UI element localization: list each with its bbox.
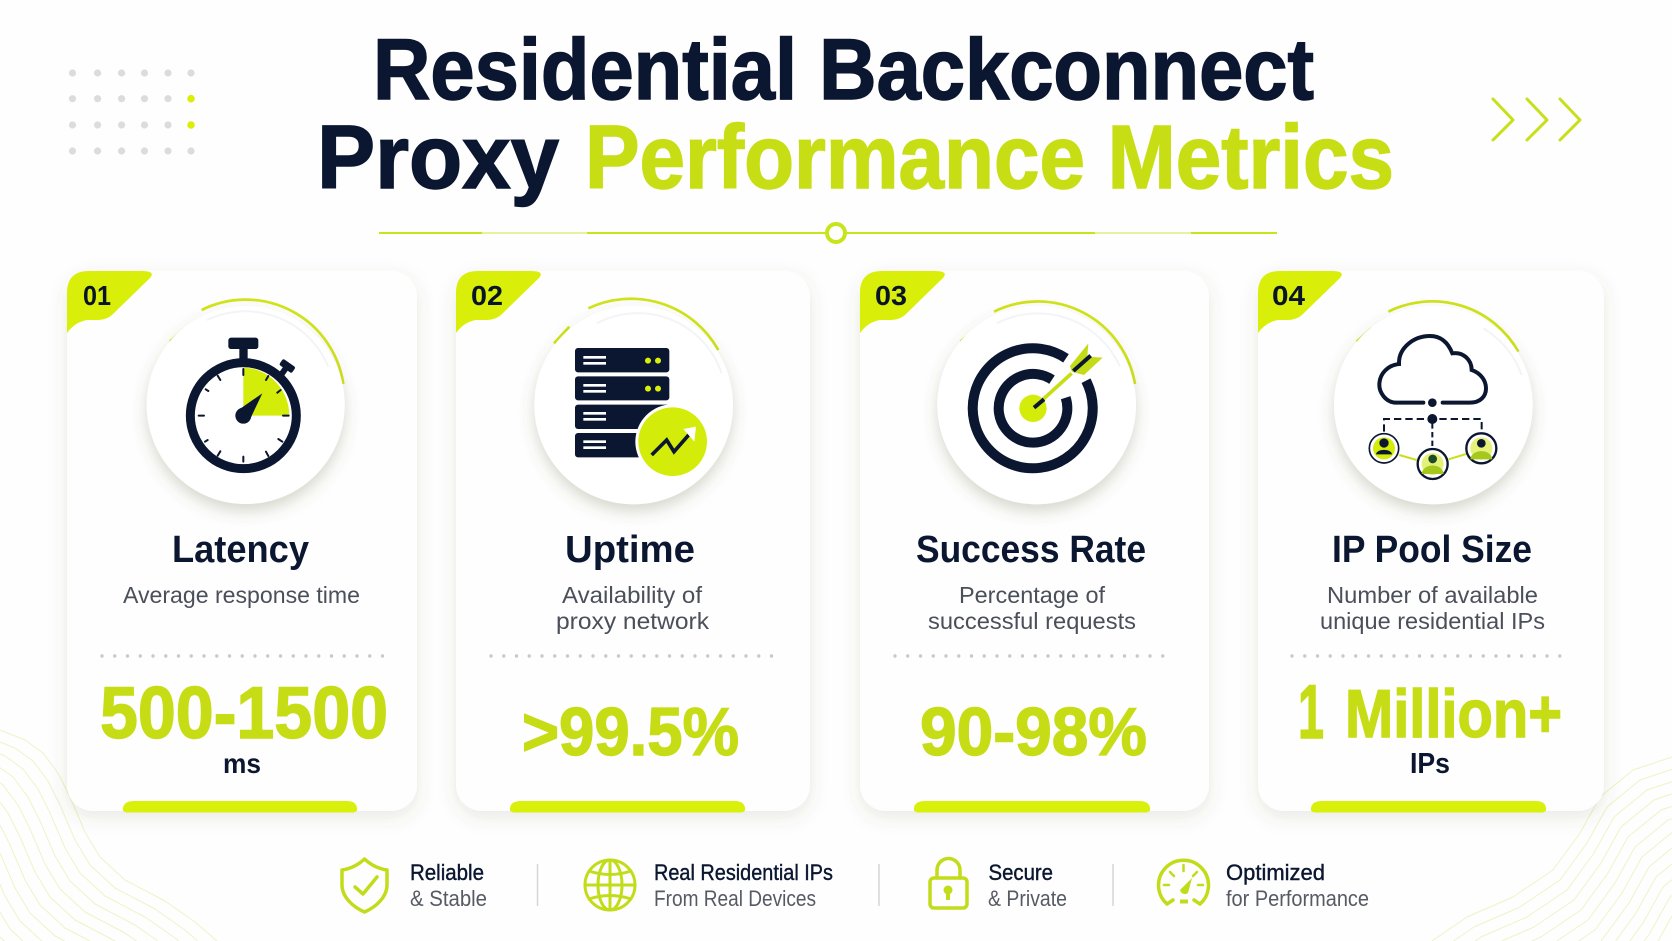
decorative wave lines: bottom left [0, 730, 217, 941]
icon: shield [342, 859, 387, 912]
label text [1226, 860, 1369, 911]
title: Performance Metrics [585, 108, 1394, 208]
card background [860, 271, 1209, 811]
description [556, 582, 710, 634]
value: 500-1500 [100, 673, 388, 754]
description: successful requests [928, 608, 1136, 634]
description: Percentage of [959, 582, 1106, 608]
footer item: reliable and stable [342, 859, 487, 912]
title: Residential Backconnect [373, 22, 1314, 118]
icon: globe [585, 860, 635, 910]
panel: card 03 Success Rate [860, 271, 1209, 812]
label text: Secure [988, 860, 1053, 885]
description: proxy network [556, 608, 710, 634]
description: unique residential IPs [1320, 608, 1545, 634]
number tab [860, 271, 945, 333]
decorative wave lines: bottom right [1432, 757, 1672, 941]
number: 01 [83, 280, 111, 311]
value [1298, 670, 1562, 755]
number: 02 [471, 280, 503, 311]
title divider [379, 224, 1277, 242]
description [1320, 582, 1545, 634]
card background [67, 271, 417, 811]
footer item: optimized for performance [1158, 860, 1369, 911]
number: 03 [875, 280, 907, 311]
icon: target with dart [937, 301, 1136, 504]
value: 1 [1298, 670, 1324, 755]
icon: triple chevrons [1493, 99, 1580, 140]
label text: Real Residential IPs [654, 860, 833, 885]
dotted separator [1292, 654, 1572, 658]
title: Proxy [317, 108, 559, 208]
dotted separator [102, 654, 383, 658]
footer item: secure and private [930, 858, 1067, 911]
label text: Optimized [1226, 860, 1325, 885]
footer item: real residential IPs [585, 860, 833, 911]
heading: Uptime [565, 529, 695, 571]
icon: padlock [930, 858, 967, 908]
heading: IP Pool Size [1332, 529, 1532, 571]
label text: Reliable [410, 860, 484, 885]
value: >99.5% [522, 694, 739, 770]
card background [456, 271, 810, 811]
number tab [456, 271, 541, 333]
panel: card 02 Uptime [456, 271, 810, 812]
label text: for Performance [1226, 886, 1369, 911]
description: Average response time [123, 582, 360, 608]
decorative dot grid [69, 69, 195, 155]
label text [410, 860, 487, 911]
label text: From Real Devices [654, 886, 816, 911]
accent bar [510, 801, 745, 812]
panel: card 04 IP Pool Size [1258, 271, 1604, 812]
card background [1258, 271, 1604, 811]
description: Number of available [1327, 582, 1538, 608]
value: Million+ [1345, 676, 1562, 752]
unit: IPs [1410, 748, 1450, 780]
icon: stopwatch [147, 300, 345, 504]
description: Availability of [562, 582, 703, 608]
label text [988, 860, 1067, 911]
icon: server with growth badge [534, 299, 733, 504]
label text: & Private [988, 886, 1067, 911]
label text [654, 860, 833, 911]
number tab [1258, 271, 1342, 333]
unit: ms [223, 748, 261, 779]
value: 90-98% [920, 694, 1147, 770]
heading: Latency [172, 529, 309, 571]
heading: Success Rate [916, 529, 1146, 571]
label text: & Stable [410, 886, 487, 911]
icon: cloud network with users [1334, 301, 1533, 504]
dotted separator [895, 654, 1175, 658]
accent bar [914, 801, 1150, 812]
number tab [67, 271, 152, 333]
title [317, 22, 1394, 208]
accent bar [123, 801, 357, 812]
icon: speed gauge [1158, 860, 1209, 904]
dotted separator [491, 654, 772, 658]
panel: card 01 Latency [67, 271, 417, 812]
description [928, 582, 1136, 634]
accent bar [1311, 801, 1546, 812]
number: 04 [1272, 280, 1305, 311]
